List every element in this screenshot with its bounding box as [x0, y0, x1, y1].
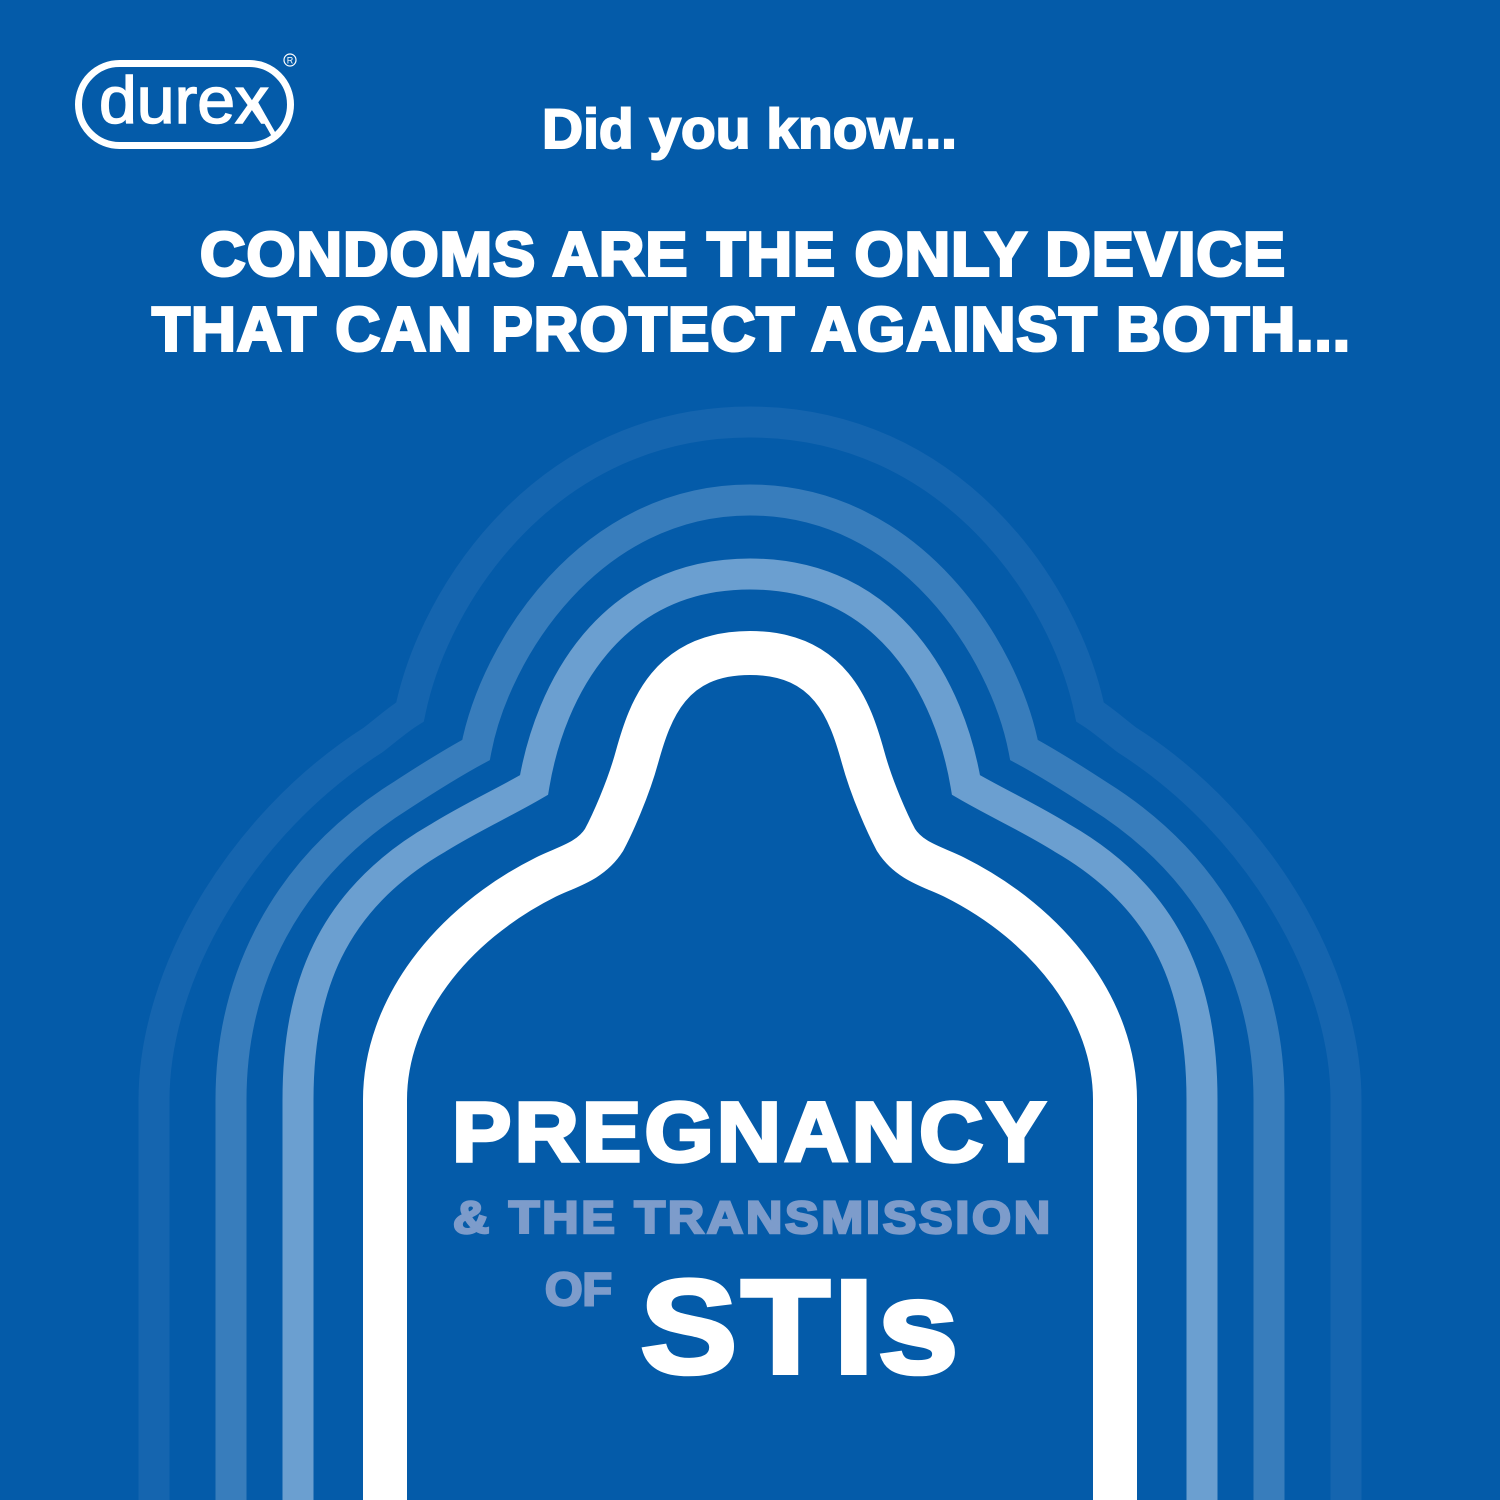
STIs: STIs	[640, 1253, 962, 1402]
intro heading: Did you know...	[542, 97, 957, 160]
inner light condom outline	[298, 574, 1202, 1500]
OF: OF	[545, 1263, 612, 1315]
main headline	[152, 220, 1351, 364]
registered mark	[284, 54, 296, 66]
text block inside condom	[452, 1085, 1053, 1402]
logo: durex	[78, 54, 296, 146]
headline line 1: CONDOMS ARE THE ONLY DEVICE	[200, 220, 1286, 290]
registered mark: R	[287, 56, 294, 66]
middle condom outline	[231, 500, 1269, 1500]
PREGNANCY: PREGNANCY	[452, 1085, 1049, 1179]
outer faint condom outline	[154, 422, 1346, 1500]
headline line 2: THAT CAN PROTECT AGAINST BOTH...	[152, 296, 1351, 364]
logo wordmark: durex	[99, 63, 269, 137]
white condom outline	[385, 653, 1115, 1500]
and the transmission: & THE TRANSMISSION	[453, 1192, 1053, 1243]
logo x tail	[254, 100, 275, 137]
logo pill outline	[78, 64, 290, 146]
